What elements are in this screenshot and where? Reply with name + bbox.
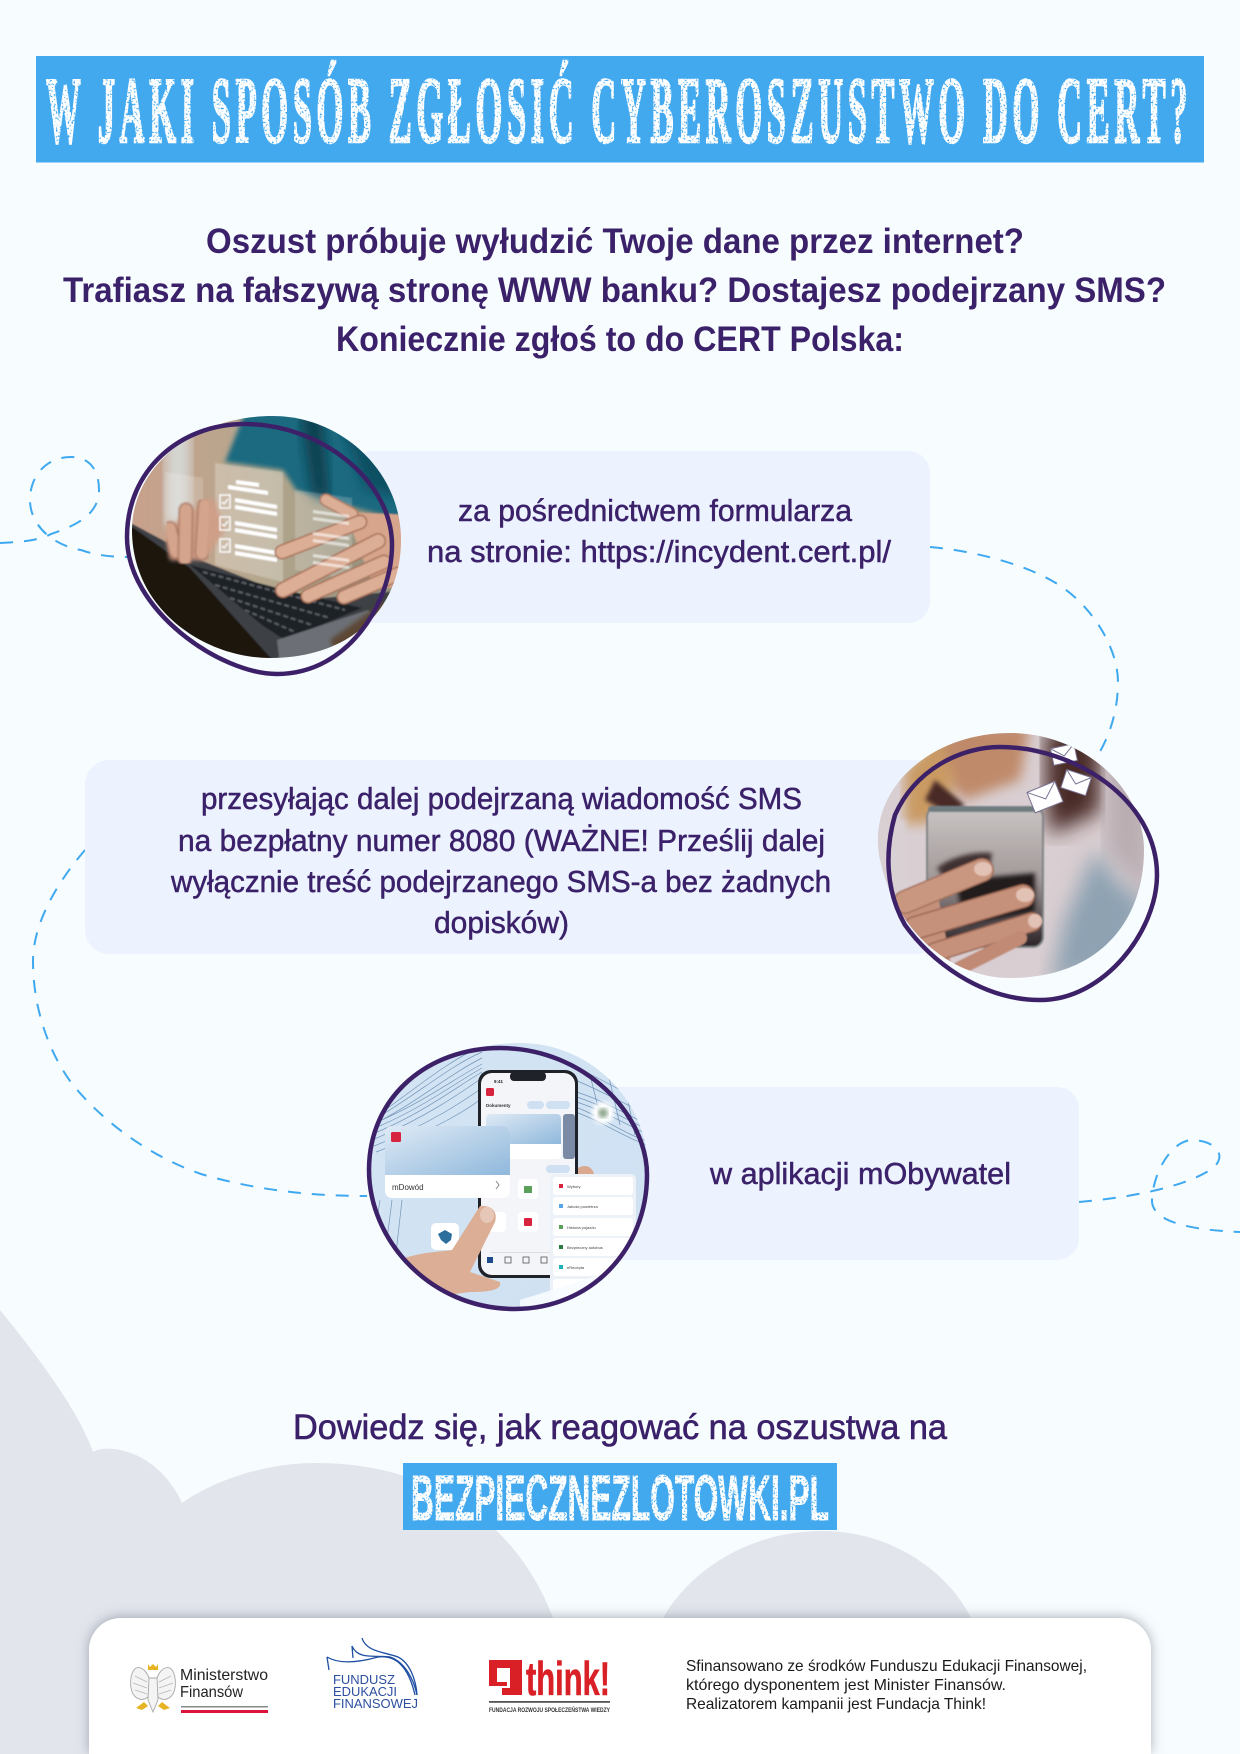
intro text: Trafiasz na fałszywą stronę WWW banku? Dostajesz podejrzany SMS? — [63, 271, 1166, 310]
icon tile — [431, 1223, 459, 1250]
website text: BEZPIECZNEZLOTOWKI.PL — [411, 1462, 829, 1534]
photo 3: mObywatel app: Bezpieczny autobus — [567, 1245, 603, 1250]
phone — [478, 1070, 578, 1278]
logo: Fundusz Edukacji Finansowej: FINANSOWEJ — [333, 1697, 418, 1711]
photo 3: mObywatel app — [360, 1040, 655, 1310]
panel 1: form — [350, 451, 930, 623]
dashed connector: middle left — [33, 850, 367, 1196]
left hand — [165, 497, 225, 560]
logo: Fundusz Edukacji Finansowej: EDUKACJI — [333, 1685, 397, 1699]
intro text: Oszust próbuje wyłudzić Twoje dane przez internet? — [206, 222, 1024, 261]
funding note: Realizatorem kampanii jest Fundacja Think! — [686, 1696, 986, 1713]
call to action text: Dowiedz się, jak reagować na oszustwa na — [293, 1408, 948, 1447]
funding note: którego dysponentem jest Minister Finansów. — [686, 1677, 1006, 1694]
photo 3: mObywatel app: Jakość powietrza — [567, 1204, 598, 1209]
translucent checklist panels — [165, 463, 352, 582]
wire mesh — [372, 1052, 646, 1247]
ring 1 — [127, 424, 392, 674]
intro text — [63, 222, 1166, 359]
footer card — [89, 1618, 1151, 1754]
services list — [550, 1174, 636, 1299]
funding note: Sfinansowano ze środków Funduszu Edukacji Finansowej, — [686, 1658, 1087, 1675]
photo 3: mObywatel app: Wybory — [567, 1184, 581, 1189]
right hand — [352, 512, 401, 590]
logo: Fundusz Edukacji Finansowej: FUNDUSZ — [333, 1673, 395, 1687]
intro text: Koniecznie zgłoś to do CERT Polska: — [336, 320, 904, 359]
logo: Think!: think! — [526, 1652, 610, 1705]
photo 3: mObywatel app: Dokumenty — [486, 1103, 511, 1108]
envelopes — [1027, 744, 1091, 813]
logo: Ministerstwo Finansów: Ministerstwo — [180, 1667, 268, 1684]
funding note — [686, 1658, 1087, 1713]
fingers — [902, 900, 952, 962]
panel 2 text — [170, 781, 831, 940]
phone — [927, 807, 1043, 947]
logo: Ministerstwo Finansów: Finansów — [180, 1684, 243, 1701]
ring 3 — [369, 1048, 647, 1309]
panel 3 text: w aplikacji mObywatel — [709, 1156, 1011, 1191]
dashed connector: top right — [930, 547, 1118, 755]
photo 3: mObywatel app: mDowód — [392, 1183, 424, 1192]
panel 3: mObywatel — [590, 1087, 1079, 1260]
photo 1: hands typing on laptop — [125, 410, 410, 674]
photo 2: hand holding phone with envelopes — [860, 725, 1157, 1000]
panel 2 text: dopisków) — [434, 905, 569, 940]
dashed connector: left loop — [0, 457, 128, 557]
photo 3: mObywatel app: Historia pojazdu — [567, 1225, 596, 1230]
title banner — [36, 56, 1204, 163]
panel 2 text: przesyłając dalej podejrzaną wiadomość SMS — [201, 781, 802, 816]
ring 2 — [888, 747, 1157, 1000]
icon: eagle — [131, 1664, 175, 1712]
dashed connector: bottom right — [1079, 1140, 1240, 1232]
logo: Think! — [489, 1652, 610, 1714]
panel 1 text: na stronie: https://incydent.cert.pl/ — [427, 534, 891, 569]
logo: Fundusz Edukacji Finansowej — [327, 1638, 418, 1711]
panel 2 text: wyłącznie treść podejrzanego SMS-a bez żadnych — [170, 864, 831, 899]
hand and finger — [406, 1166, 594, 1298]
photo 3: mObywatel app: 9:41 — [494, 1079, 504, 1084]
photo 3: mObywatel app: eRecepta — [567, 1265, 585, 1270]
panel 2: SMS — [85, 760, 940, 954]
panel 1 text — [427, 493, 891, 569]
panel 2 text: na bezpłatny numer 8080 (WAŻNE! Prześlij dalej — [178, 823, 825, 858]
mDowód card — [385, 1126, 510, 1198]
logo: Ministerstwo Finansów — [131, 1664, 268, 1713]
website banner — [403, 1462, 837, 1534]
background clouds — [0, 1310, 971, 1754]
panel 1 text: za pośrednictwem formularza — [458, 493, 853, 528]
logo: Think!: FUNDACJA ROZWOJU SPOŁECZEŃSTWA WIEDZY — [489, 1706, 610, 1714]
